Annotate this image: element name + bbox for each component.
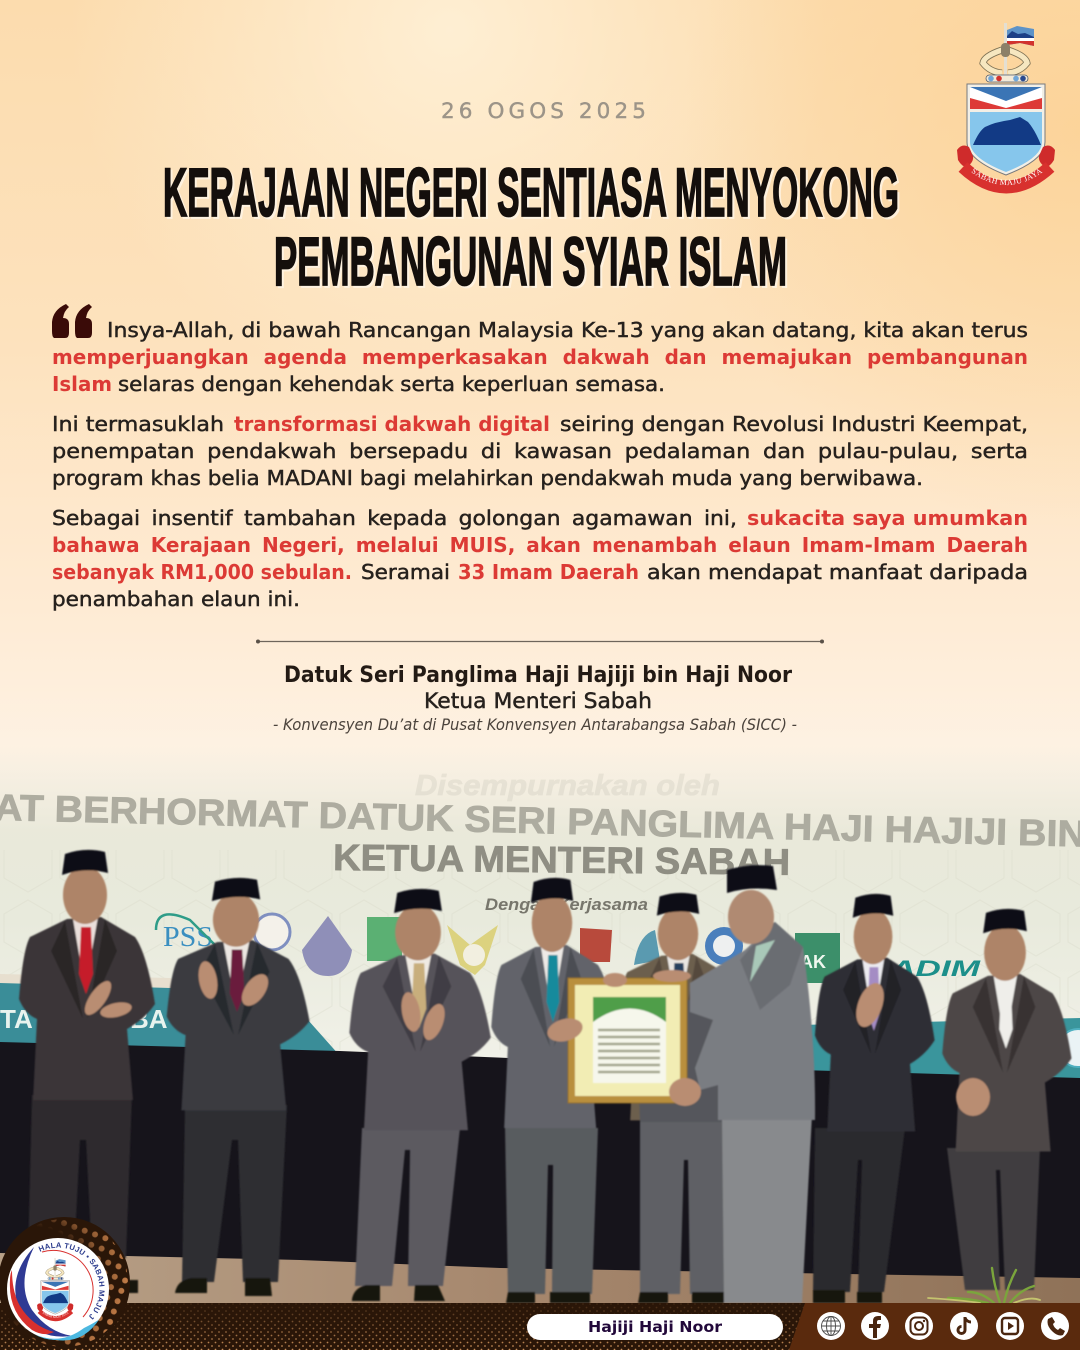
- paragraph 3: 33 Imam Daerah: [458, 560, 639, 584]
- certificate: [568, 978, 687, 1103]
- paragraph 2: program khas belia MADANI bagi melahirkan pendakwah muda yang berwibawa.: [52, 466, 923, 490]
- photo: banner backdrop: TA: [0, 1004, 33, 1034]
- paragraph 3: akan mendapat manfaat daripada: [647, 560, 1028, 584]
- hands on certificate: [545, 970, 701, 1106]
- attribution: name and position: Ketua Menteri Sabah: [424, 689, 652, 713]
- person 4: [491, 878, 616, 1303]
- paragraph 3: Seramai: [361, 560, 450, 584]
- photo: dark stage curtain: [0, 1042, 1080, 1303]
- emblem: Sabah coat of arms: SABAH MAJU JAYA: [972, 168, 1042, 186]
- paragraph 1: [52, 318, 1028, 396]
- photo: banner backdrop: KETUA MENTERI SABAH: [333, 837, 790, 883]
- name pill: Hajiji Haji Noor: [588, 1318, 723, 1336]
- photo: stage floor: [0, 1253, 1080, 1304]
- icon: youtube: [996, 1312, 1024, 1340]
- icon: tiktok: [950, 1312, 978, 1340]
- paragraph 3: sukacita saya umumkan: [747, 506, 1028, 530]
- paragraph 1: Islam: [52, 372, 112, 396]
- badge emblem: [37, 1258, 73, 1319]
- event photo: [0, 745, 1080, 1304]
- paragraph 3: bahawa Kerajaan Negeri, melalui MUIS, akan menambah elaun Imam-Imam Daerah: [52, 533, 1028, 557]
- quotation mark icon: [52, 304, 92, 338]
- paragraph 3: Sebagai insentif tambahan kepada golongan agamawan ini,: [52, 506, 737, 530]
- paragraph 1: Insya-Allah, di bawah Rancangan Malaysia Ke-13 yang akan datang, kita akan terus: [107, 318, 1028, 342]
- photo: banner backdrop: PSS: [163, 922, 213, 953]
- person 5: [617, 893, 742, 1303]
- photo: plant: [928, 1268, 1040, 1303]
- paragraph 3: [52, 506, 1028, 611]
- attribution: name and position: Datuk Seri Panglima Haji Hajiji bin Haji Noor: [284, 663, 792, 688]
- paragraph 2: Ini termasuklah: [52, 412, 224, 436]
- white badge circle: [7, 1238, 109, 1340]
- date: 26 OGOS 2025: [441, 99, 650, 123]
- name pill: [527, 1314, 783, 1340]
- person 6: [690, 865, 815, 1303]
- person 8: [942, 909, 1072, 1290]
- person 2: [167, 878, 310, 1296]
- icon: website globe: [817, 1312, 845, 1340]
- person 7: [813, 894, 935, 1303]
- attribution divider: [256, 640, 824, 644]
- person 1: [19, 850, 155, 1293]
- dotted dark sphere: [0, 1217, 130, 1349]
- photo: banner backdrop: Dengan Kerjasama: [485, 895, 648, 914]
- badge swoosh: [10, 1247, 100, 1341]
- title: [163, 154, 901, 302]
- footer bar: [0, 1303, 1080, 1350]
- paragraph 3: penambahan elaun ini.: [52, 587, 300, 611]
- paragraph 2: [52, 412, 1028, 490]
- emblem: Sabah coat of arms: [957, 23, 1055, 194]
- photo: eight men on stage: [19, 850, 1072, 1303]
- photo: banner backdrop: AT BERHORMAT DATUK SERI PANGLIMA HAJI HAJIJI BIN: [0, 787, 1080, 855]
- photo: banner backdrop: ADIM: [888, 956, 981, 981]
- icon: facebook: [861, 1312, 889, 1340]
- photo: banner backdrop: BA: [130, 1004, 168, 1034]
- paragraph 1: memperjuangkan agenda memperkasakan dakwah dan memajukan pembangunan: [52, 345, 1028, 369]
- photo: banner backdrop: AK: [800, 952, 826, 972]
- paragraph 1: selaras dengan kehendak serta keperluan semasa.: [118, 372, 665, 396]
- paragraph 2: transformasi dakwah digital: [234, 412, 550, 436]
- badge red arc: [42, 1250, 93, 1317]
- icon: phone: [1041, 1312, 1069, 1340]
- paragraph 2: seiring dengan Revolusi Industri Keempat,: [560, 412, 1028, 436]
- person 3: [349, 889, 491, 1301]
- photo: banner backdrop: Disempurnakan oleh: [415, 770, 720, 802]
- paragraph 3: sebanyak RM1,000 sebulan.: [52, 560, 352, 584]
- icon: instagram: [905, 1312, 933, 1340]
- social icons: [817, 1312, 1069, 1340]
- paragraph 2: penempatan pendakwah bersepadu di kawasan pedalaman dan pulau-pulau, serta: [52, 439, 1028, 463]
- logo badge: Hala Tuju Sabah Maju Jaya: [0, 1217, 130, 1349]
- attribution: name and position: - Konvensyen Du’at di Pusat Konvensyen Antarabangsa Sabah (SICC) -: [273, 715, 797, 734]
- photo: banner backdrop: [0, 745, 1080, 1085]
- attribution: name and position: [273, 663, 797, 734]
